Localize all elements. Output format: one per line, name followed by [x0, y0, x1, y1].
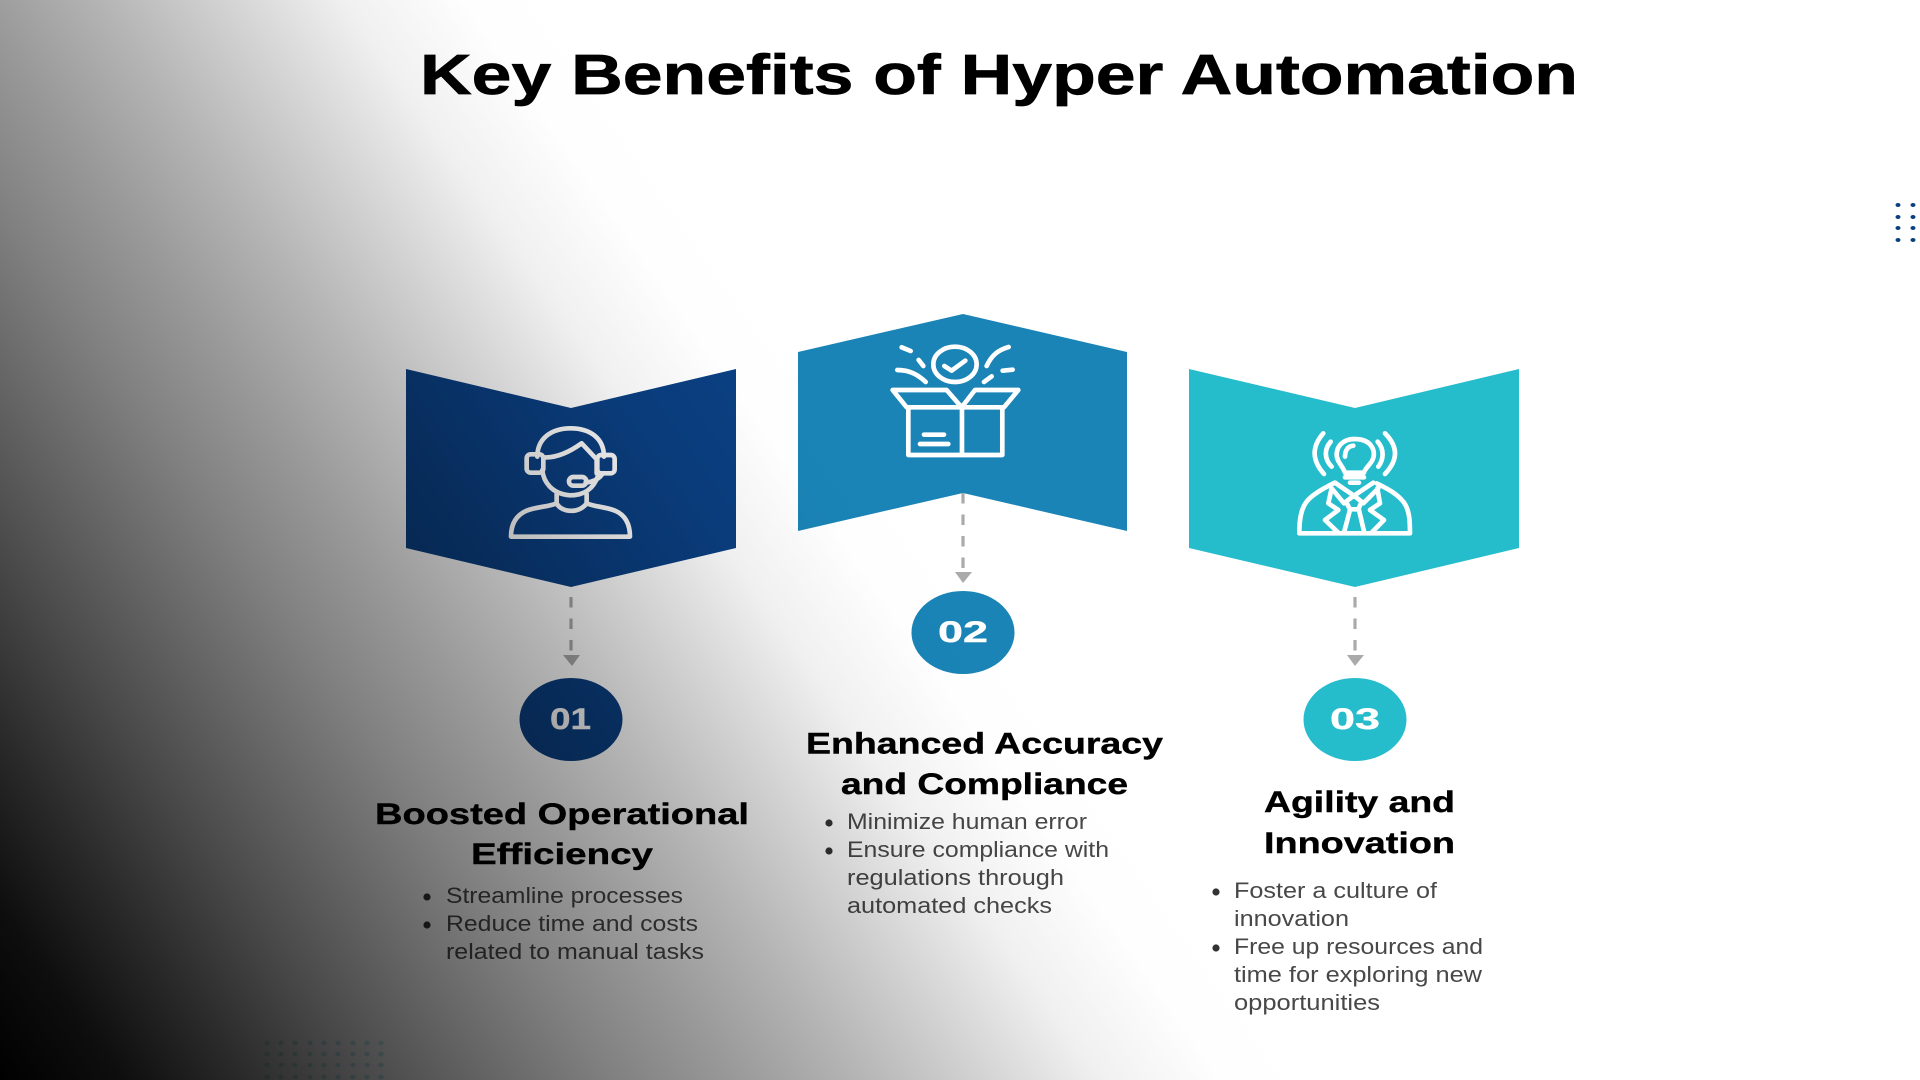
icon: support agent with headset: [511, 428, 630, 537]
heading 1: Boosted Operational: [375, 798, 749, 831]
panel: Boosted Operational Efficiency: [375, 369, 749, 964]
number badge 01: 01: [550, 703, 591, 736]
bullet list 3: [1212, 878, 1483, 1015]
heading 3: Innovation: [1264, 827, 1455, 860]
bullet list 2: Minimize human error: [847, 809, 1088, 834]
chevron 1: [406, 369, 736, 587]
bullet list 3: time for exploring new: [1234, 962, 1483, 987]
bullet list 2: regulations through: [847, 865, 1064, 890]
arrow 2: [955, 493, 972, 583]
heading 2: Enhanced Accuracy: [806, 728, 1163, 760]
heading 1: [375, 798, 749, 871]
decorative dot grid: bottom left: [264, 1041, 384, 1079]
bullet list 1: Reduce time and costs: [446, 911, 698, 936]
heading 2: and Compliance: [841, 768, 1128, 801]
heading 1: Efficiency: [471, 838, 653, 871]
bullet list 3: innovation: [1234, 906, 1349, 931]
bullet list 1: Streamline processes: [446, 883, 683, 908]
number badge 03: 03: [1330, 703, 1380, 736]
bullet list 2: Ensure compliance with: [847, 837, 1109, 862]
number badge 02: 02: [938, 616, 988, 649]
arrow 3: [1347, 597, 1364, 666]
arrow 1: [563, 597, 580, 666]
bullet list 3: Free up resources and: [1234, 934, 1483, 959]
icon: person with light bulb head: [1299, 433, 1410, 533]
title: Key Benefits of Hyper Automation: [420, 43, 1578, 107]
bullet list 3: Foster a culture of: [1234, 878, 1438, 903]
chevron 2: [798, 314, 1127, 531]
heading 3: [1264, 786, 1455, 860]
bullet list 1: related to manual tasks: [446, 939, 704, 964]
decorative dot grid: top right: [1896, 203, 1916, 242]
number badge 01: [520, 678, 622, 761]
chevron 3: [1189, 369, 1519, 587]
bullet list 2: [825, 809, 1109, 918]
bullet list 1: [423, 883, 704, 964]
heading 3: Agility and: [1264, 786, 1455, 819]
number badge 03: [1304, 678, 1406, 761]
panel: Agility and Innovation: [1189, 369, 1519, 1015]
icon: open box with check mark: [893, 347, 1018, 455]
bullet list 2: automated checks: [847, 893, 1052, 918]
number badge 02: [912, 591, 1014, 674]
panel: Enhanced Accuracy and Compliance: [798, 314, 1163, 918]
heading 2: [806, 728, 1163, 801]
bullet list 3: opportunities: [1234, 990, 1380, 1015]
